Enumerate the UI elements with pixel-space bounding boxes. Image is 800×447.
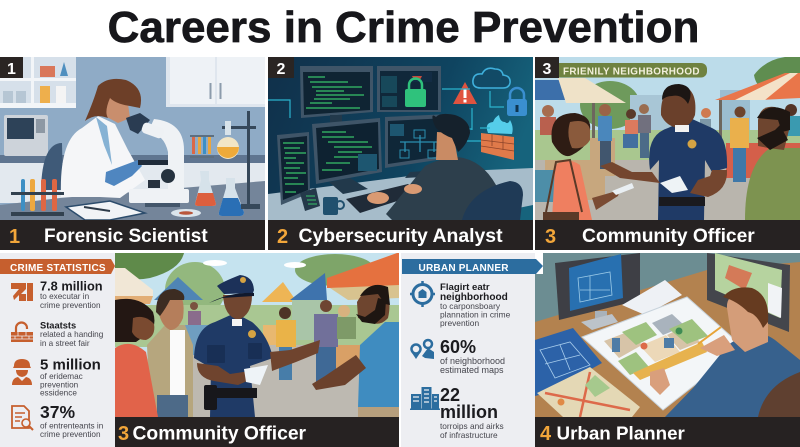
- icon: document search: [12, 406, 33, 430]
- caption: urban planner: 4: [540, 423, 552, 445]
- caption: forensic scientist: 1: [9, 226, 20, 248]
- caption: urban planner: [535, 417, 800, 447]
- illustration: planner: [650, 287, 800, 417]
- title: Careers in Crime Prevention: [108, 3, 699, 52]
- illustration: ruler: [633, 342, 707, 380]
- stat: flagirt eatr neighborhood: prevention: [440, 318, 479, 328]
- illustration: analyst: [367, 114, 523, 220]
- stat: 37%: of entrenteants in: [40, 422, 104, 430]
- stat: 7.8 million: to executar in: [40, 292, 90, 301]
- illustration: man in blue: [312, 285, 399, 417]
- header: urban planner: URBAN PLANNER: [418, 263, 509, 274]
- illustration: background crowd: [188, 300, 356, 382]
- icon: target house: [410, 281, 435, 307]
- stat: 60%: 60%: [440, 337, 476, 357]
- caption: forensic scientist: Forensic Scientist: [44, 226, 208, 247]
- stat: 60%: of neighborhood: [440, 356, 505, 366]
- panel: community officer bottom: [115, 253, 399, 447]
- stat: 5 million: 5 million: [40, 356, 101, 374]
- icon: padlock: [507, 88, 527, 116]
- caption: urban planner: Urban Planner: [556, 422, 686, 444]
- illustration: man in tan shirt: [147, 289, 193, 417]
- stat: 22 million: million: [440, 402, 498, 422]
- illustration: left monitor: [555, 253, 640, 330]
- stat: staatsts: [11, 320, 104, 348]
- caption: cybersecurity analyst: [268, 220, 533, 250]
- icon: warning triangle: [453, 82, 477, 104]
- stat: 60%: estimated maps: [440, 365, 504, 375]
- banner: friendly neighborhood: [550, 63, 707, 78]
- illustration: desk: [268, 168, 533, 220]
- illustration: market background: [115, 253, 399, 417]
- icon: city buildings: [410, 387, 440, 410]
- illustration: plan sheet: [582, 297, 743, 410]
- caption: community officer: 3: [545, 226, 556, 248]
- caption: cybersecurity analyst: 2: [277, 226, 288, 248]
- stat: 7.8 million: crime prevention: [40, 301, 101, 310]
- icon: broken numerals: [11, 283, 33, 301]
- stat: staatsts: in a street fair: [40, 339, 90, 348]
- illustration: mug: [323, 197, 344, 215]
- stat: flagirt eatr neighborhood: Flagirt eatr: [440, 282, 490, 293]
- panel: community officer top: [535, 57, 800, 250]
- stat: 5 million: of eridemac: [40, 372, 83, 381]
- stat: 5 million: essidence: [40, 388, 77, 398]
- stat: 5 million: [12, 356, 101, 398]
- badge: 2: [268, 57, 294, 78]
- illustration: monitors: [277, 66, 450, 211]
- illustration: blueprint: [535, 328, 602, 396]
- icon: map pins: [412, 340, 434, 359]
- panel: urban planner stats: [401, 253, 543, 447]
- caption: forensic scientist: [0, 220, 265, 250]
- illustration: lab counter: [0, 155, 265, 220]
- header: crime statistics: [0, 259, 115, 274]
- icon: firewall: [481, 115, 514, 160]
- caption: community officer bottom: Community Officer: [132, 424, 307, 444]
- header: urban planner: [402, 259, 543, 274]
- illustration: wooden desk: [535, 262, 800, 417]
- stat: staatsts: related a handing: [40, 330, 104, 339]
- stat: staatsts: Staatsts: [40, 320, 76, 330]
- badge: 1: 1: [7, 61, 16, 78]
- illustration: right monitor: [707, 253, 790, 332]
- badge: 1: [0, 57, 23, 78]
- panel: cybersecurity analyst: [268, 57, 533, 250]
- stat: flagirt eatr neighborhood: to carponsboary: [440, 301, 501, 311]
- illustration: left tents: [535, 78, 651, 202]
- stat: 22 million: torroips and airks: [440, 421, 504, 431]
- illustration: lab shelves: [0, 57, 76, 108]
- illustration: woman: [543, 113, 634, 220]
- stat: 22 million: [410, 385, 504, 440]
- illustration: neighborhood map: [537, 367, 640, 417]
- illustration: man in green: [745, 107, 800, 220]
- caption: community officer bottom: [115, 417, 399, 447]
- stat: flagirt eatr neighborhood: neighborhood: [440, 292, 508, 303]
- illustration: upper cabinets: [166, 57, 265, 107]
- illustration: police officer: [194, 275, 320, 417]
- header: crime statistics: CRIME STATISTICS: [10, 263, 106, 274]
- caption: cybersecurity analyst: Cybersecurity Analyst: [298, 225, 503, 247]
- icon: cloud: [473, 68, 510, 88]
- panel: crime statistics: [0, 253, 115, 447]
- panel: urban planner scene: [535, 253, 800, 447]
- panel: forensic scientist: [0, 57, 265, 250]
- stat: flagirt eatr neighborhood: plannation in crime: [440, 310, 511, 320]
- illustration: officer: [600, 84, 727, 220]
- banner: friendly neighborhood: FRIENILY NEIGHBORHOOD: [563, 66, 700, 78]
- illustration: papers: [66, 201, 201, 220]
- stat: 7.8 million: [11, 278, 103, 310]
- badge: 2: 2: [277, 61, 286, 78]
- stat: 37%: [12, 402, 104, 439]
- stat: flagirt eatr neighborhood: [410, 281, 511, 328]
- badge: 3: [535, 57, 559, 78]
- stat: 37%: crime prevention: [40, 430, 101, 439]
- icon: brick lock: [11, 322, 33, 342]
- stat: 22 million: 22: [440, 385, 460, 405]
- stat: 60%: [412, 337, 505, 375]
- illustration: test tubes and rack: [11, 135, 214, 216]
- illustration: microwave: [4, 115, 48, 156]
- illustration: market tents: [115, 253, 399, 373]
- stat: 22 million: of infrastructure: [440, 430, 498, 440]
- illustration: flasks and stand: [195, 111, 260, 216]
- caption: community officer: Community Officer: [582, 226, 755, 247]
- icon: officer: [12, 359, 32, 385]
- badge: 3: 3: [543, 61, 552, 78]
- caption: community officer bottom: 3: [118, 423, 129, 445]
- illustration: right stall: [700, 73, 800, 182]
- illustration: circuit lines: [268, 89, 504, 141]
- illustration: scientist: [41, 79, 145, 198]
- illustration: keyboard: [346, 184, 422, 213]
- stat: 5 million: prevention: [40, 380, 79, 390]
- stat: 37%: 37%: [40, 402, 75, 422]
- caption: community officer: [535, 220, 800, 250]
- illustration: microscope: [126, 113, 189, 207]
- stat: 7.8 million: 7.8 million: [40, 278, 103, 294]
- illustration: stacked plans: [622, 280, 682, 315]
- illustration: park background: [535, 57, 800, 220]
- illustration: woman in coral: [115, 299, 158, 417]
